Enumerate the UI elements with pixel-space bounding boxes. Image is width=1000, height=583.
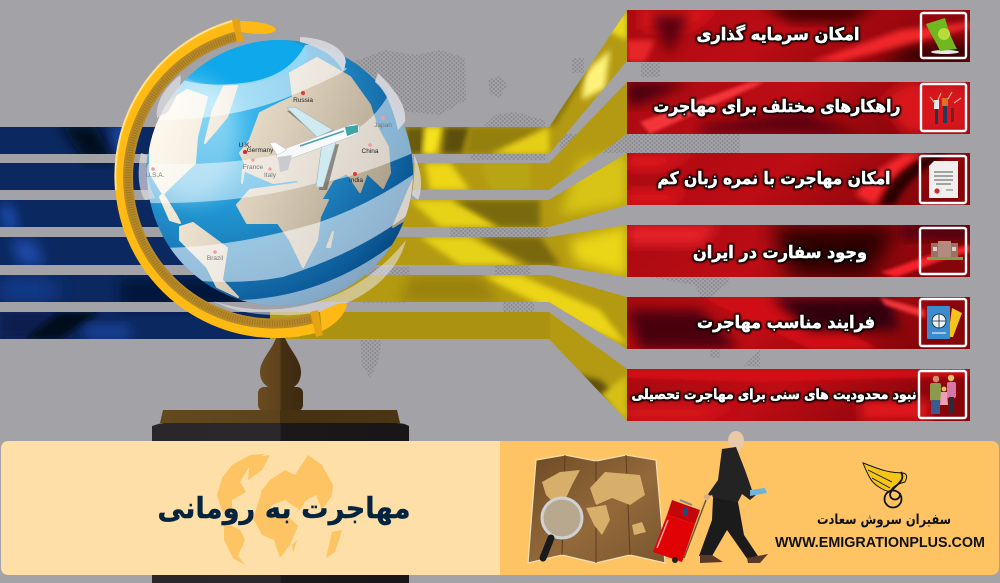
country markers: France — [243, 164, 263, 171]
top polar cap — [188, 40, 308, 86]
country markers: India — [349, 177, 363, 184]
country markers: U.K. — [239, 142, 252, 149]
globe meridian ring — [115, 18, 347, 337]
globe stand — [152, 338, 409, 441]
stand neck — [260, 338, 301, 388]
banner 3: low language score — [627, 153, 970, 205]
ring bottom clasp — [310, 310, 323, 337]
translucent ribbons overhanging the globe — [300, 37, 346, 72]
country markers: Brazil — [207, 255, 224, 262]
continents — [150, 58, 413, 297]
banner 4: embassy in Iran — [627, 225, 970, 277]
country markers: U.S.A. — [146, 172, 165, 179]
airplane — [270, 107, 359, 190]
ring top clasp — [232, 18, 244, 43]
country markers: Japan — [374, 122, 392, 129]
icon: family — [919, 371, 966, 418]
globe — [139, 31, 421, 320]
stand knob — [258, 387, 303, 411]
label 1: امکان سرمایه گذاری — [696, 24, 860, 45]
illustration: walking man in suit — [699, 431, 768, 563]
dotted world map backdrop — [353, 50, 760, 378]
icon: world map watermark — [217, 454, 342, 565]
icon: passport and ticket — [920, 299, 966, 346]
country markers: Russia — [293, 97, 313, 104]
banner 6: no age limits — [627, 369, 970, 421]
left highlight — [140, 78, 240, 202]
title text: مهاجرت به رومانی — [158, 491, 410, 525]
label 6: نبود محدودیت های سنی برای مهاجرت تحصیلی — [632, 387, 916, 403]
translucent latitude stripes — [158, 44, 347, 120]
stand base plinth — [152, 423, 409, 441]
country markers: Italy — [264, 172, 277, 179]
banner 5: suitable process — [627, 297, 970, 349]
illustration: red suitcase — [653, 500, 706, 563]
label 5: فرایند مناسب مهاجرت — [697, 313, 875, 333]
logo: winged bird — [863, 463, 907, 508]
stand base top — [160, 410, 400, 423]
logo Persian name: سفیران سروش سعادت — [817, 512, 951, 528]
gold ribbons connecting globe to banners — [270, 0, 630, 425]
banner 2: various solutions — [627, 82, 970, 134]
banner 1: investment option — [627, 5, 970, 62]
country markers — [146, 91, 392, 262]
country markers: China — [362, 148, 379, 155]
country markers: Germany — [247, 147, 274, 154]
plinth below panels — [152, 574, 409, 583]
icon: embassy building — [920, 228, 966, 274]
label 3: امکان مهاجرت با نمره زبان کم — [658, 169, 890, 189]
label 4: وجود سفارت در ایران — [693, 243, 867, 263]
illustration: folded map with magnifier — [528, 455, 665, 563]
branding panel — [500, 431, 999, 575]
label 2: راهکارهای مختلف برای مهاجرت — [654, 97, 900, 117]
website url: WWW.EMIGRATIONPLUS.COM — [775, 535, 985, 551]
icon: document — [920, 156, 966, 203]
title panel — [1, 441, 500, 575]
icon: cheering people — [921, 84, 966, 131]
icon: banknote — [921, 13, 966, 58]
blue ribbons on the left — [0, 127, 270, 339]
